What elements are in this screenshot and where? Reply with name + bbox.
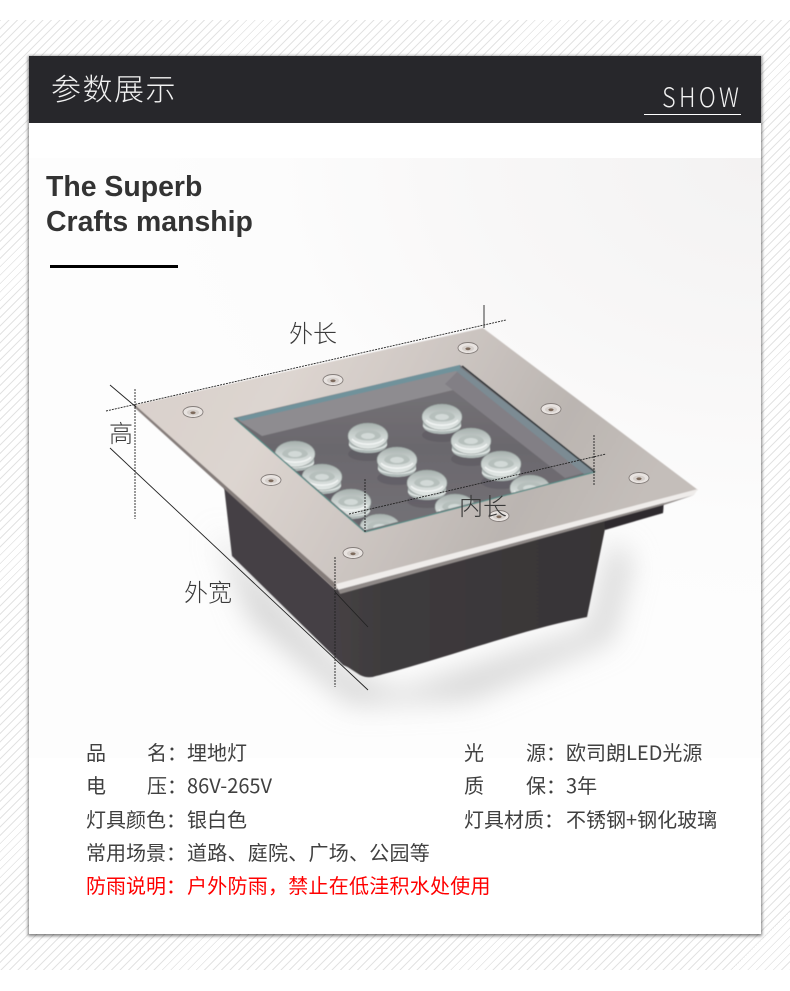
spec: warranty: 质 bbox=[464, 770, 484, 799]
spec: light source bbox=[464, 737, 702, 766]
soft drop shadow under housing bbox=[215, 530, 632, 705]
spec list: left column: 银白色 bbox=[187, 804, 247, 833]
title: 参数展示 bbox=[51, 74, 177, 107]
spec: product name: 名： bbox=[147, 737, 187, 766]
header bar bbox=[29, 56, 761, 123]
glass window with LEDs bbox=[234, 365, 595, 552]
tray right wall bbox=[445, 369, 591, 478]
dimension lines bbox=[106, 305, 606, 690]
spec list: right column bbox=[464, 737, 717, 833]
dimension label: 外宽: 外宽 bbox=[184, 580, 232, 607]
spec list: left column: 道路、庭院、广场、公园等 bbox=[187, 837, 430, 866]
spec: voltage: 电 bbox=[86, 770, 106, 799]
label text: SHOW: SHOW bbox=[662, 76, 742, 115]
housing flange bbox=[604, 498, 664, 530]
spec list: left column bbox=[86, 737, 491, 899]
plate front bevel bbox=[336, 489, 698, 590]
heading: The Superb Craftsmanship: Crafts manship bbox=[46, 206, 253, 238]
spec: material: 不锈钢+钢化玻璃 bbox=[566, 804, 717, 833]
spec: usage bbox=[86, 837, 430, 866]
spec: voltage: 压： bbox=[147, 770, 187, 799]
spec: voltage: 86V-265V bbox=[187, 770, 272, 799]
label: SHOW with underline bbox=[644, 80, 741, 115]
spec: usage: 常用场景： bbox=[86, 837, 186, 866]
spec: warranty: 保： bbox=[526, 770, 566, 799]
heading underline bbox=[50, 265, 178, 268]
heading: The Superb Craftsmanship: The Superb bbox=[46, 171, 202, 203]
dimension label: 高: 高 bbox=[109, 421, 133, 448]
spec: light source: 欧司朗LED光源 bbox=[566, 737, 702, 766]
tray far wall bbox=[238, 369, 478, 436]
spec: light source: 光 bbox=[464, 737, 484, 766]
heading: The Superb Craftsmanship bbox=[46, 171, 253, 238]
dimension label: 内长: 内长 bbox=[459, 494, 507, 521]
spec: warranty bbox=[464, 770, 597, 799]
spec: rain warning: 户外防雨，禁止在低洼积水处使用 bbox=[187, 870, 491, 899]
spec: warranty: 3年 bbox=[566, 770, 597, 799]
housing front face bbox=[336, 498, 664, 677]
spec: colour bbox=[86, 804, 247, 833]
spec: material bbox=[464, 804, 717, 833]
product diagram: square LED inground light bbox=[106, 305, 698, 714]
spec: colour: 灯具颜色： bbox=[86, 804, 186, 833]
spec: material: 灯具材质： bbox=[464, 804, 564, 833]
plate screws bbox=[183, 342, 649, 558]
plate left bevel bbox=[134, 405, 336, 590]
spec: product name: 品 bbox=[86, 737, 106, 766]
housing: dark body bbox=[224, 486, 664, 677]
spec: voltage bbox=[86, 770, 272, 799]
housing left face bbox=[224, 486, 350, 668]
LED lenses bbox=[274, 403, 550, 531]
spec: product name bbox=[86, 737, 247, 766]
panel: photo background bbox=[29, 158, 761, 758]
spec: light source: 源： bbox=[526, 737, 566, 766]
spec: rain warning: 防雨说明： bbox=[86, 870, 186, 899]
stainless steel plate bbox=[134, 328, 698, 594]
spec: product name: 埋地灯 bbox=[187, 737, 247, 766]
dimension label: 外长: 外长 bbox=[289, 321, 337, 348]
